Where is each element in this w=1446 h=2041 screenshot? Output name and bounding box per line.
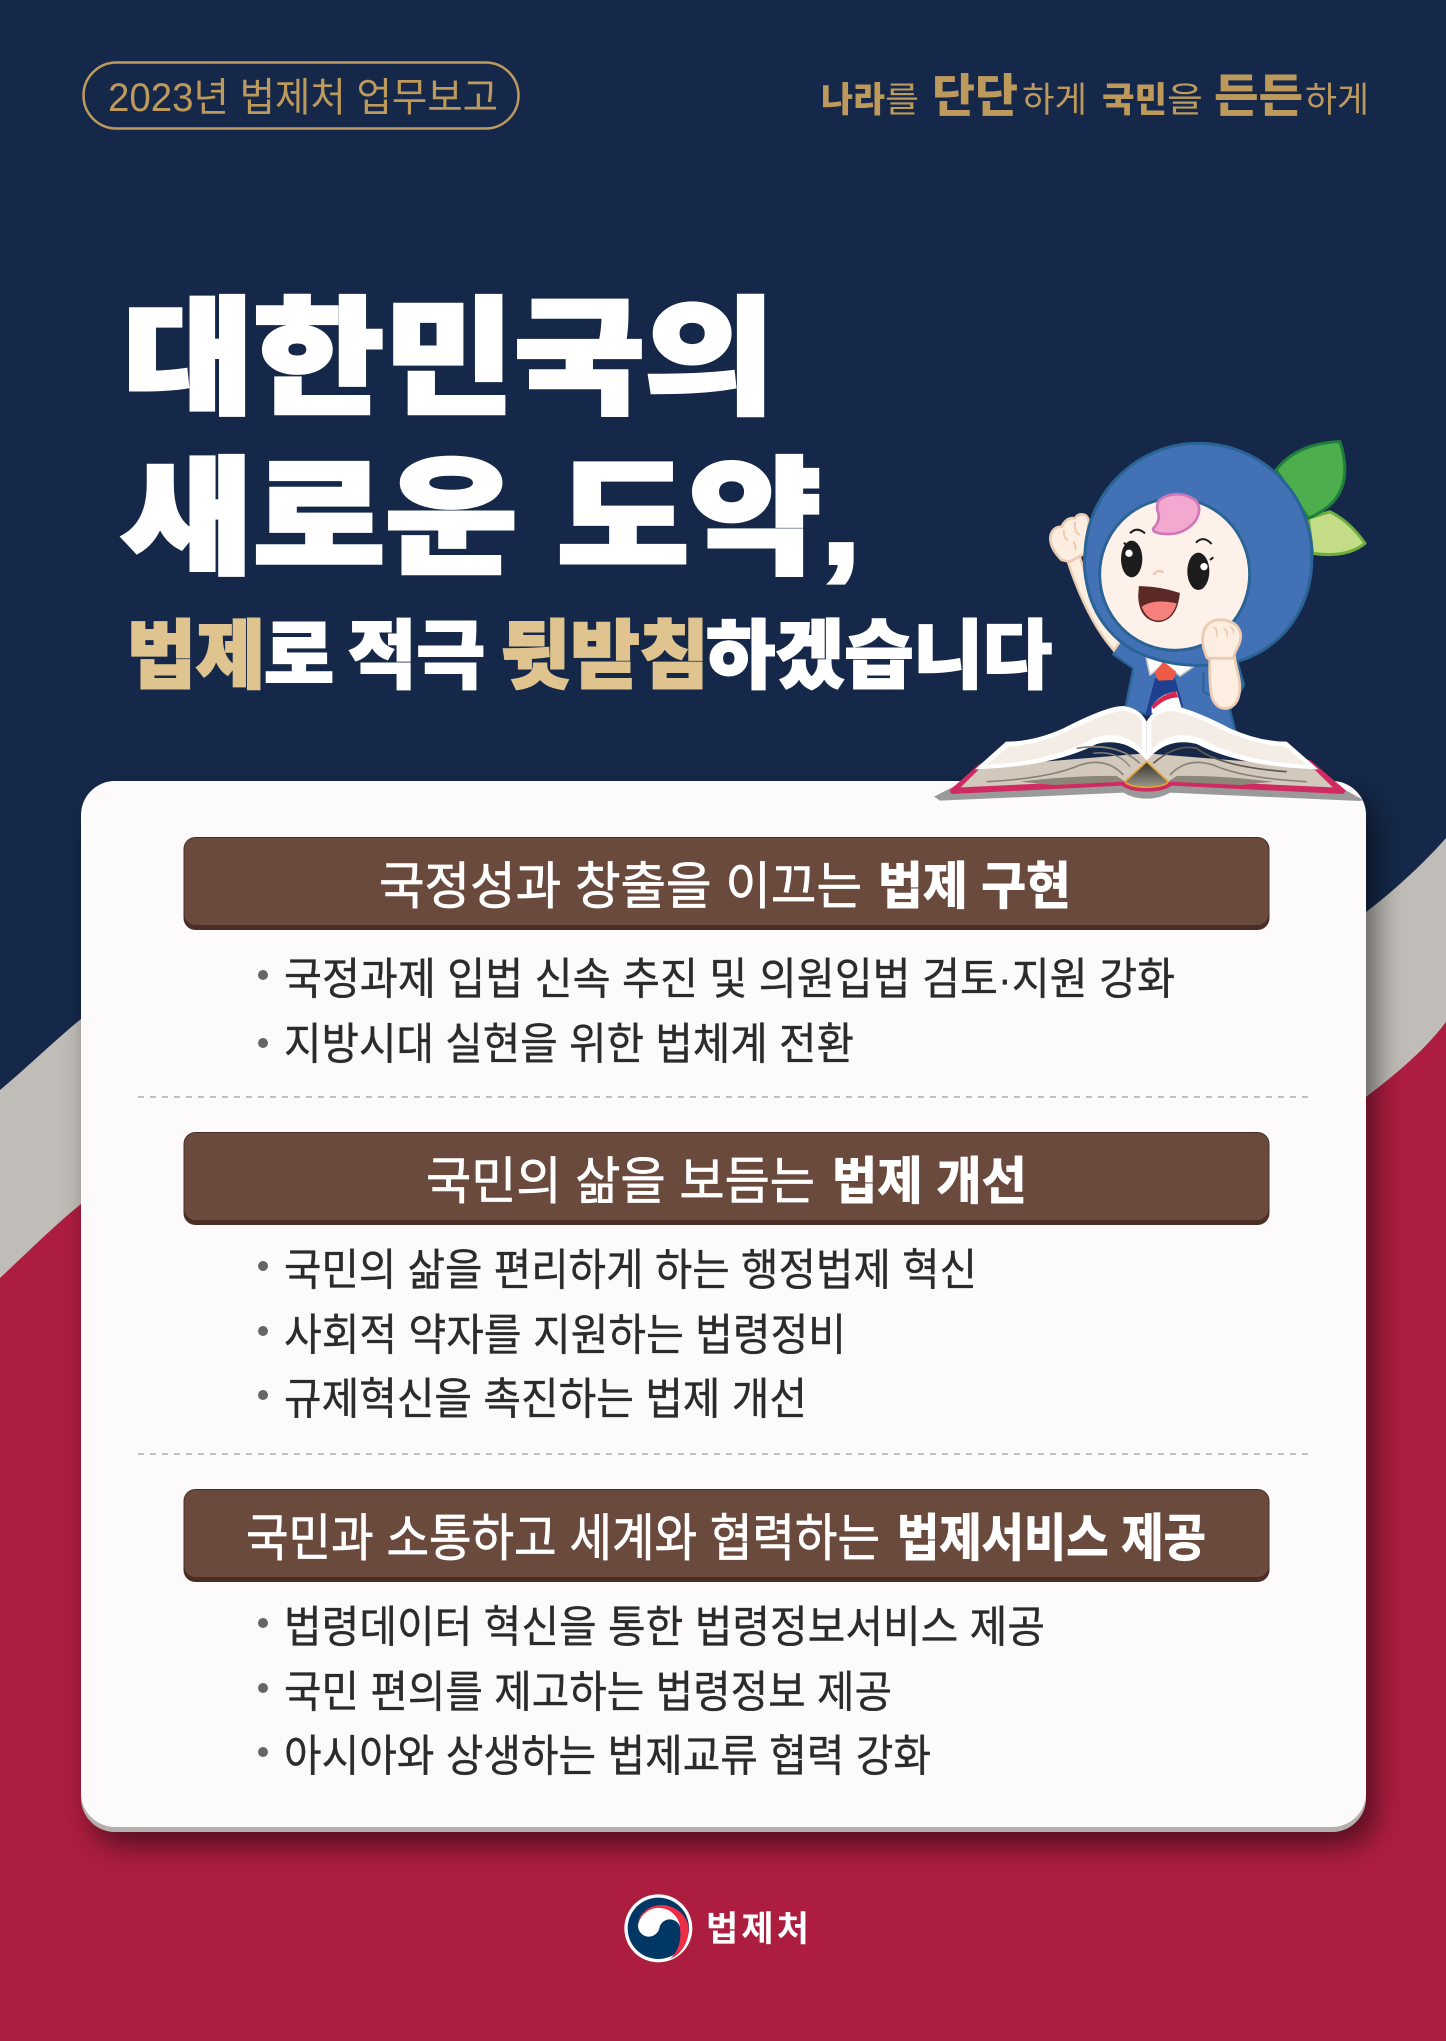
slogan: 단단 (932, 70, 1018, 122)
subtitle: 뒷받침 (501, 614, 709, 698)
section 2 bullets (258, 1246, 977, 1424)
badge: report title: 2023년 법제처 업무보고 (108, 76, 498, 120)
slogan: 하게 (1022, 81, 1087, 120)
section 2 bullets: 사회적 약자를 지원하는 법령정비 (284, 1311, 846, 1360)
book left pages (961, 706, 1147, 787)
section 3 bullets: 아시아와 상생하는 법제교류 협력 강화 (284, 1732, 931, 1781)
subtitle: 법제 (127, 614, 265, 698)
mascot hair petal (1153, 494, 1199, 534)
book shadow (934, 782, 1363, 801)
subtitle: 로 (264, 614, 334, 698)
section 1 heading bar: 국정성과 창출을 이끄는 (379, 858, 862, 915)
slogan: 하게 (1305, 81, 1369, 120)
section 3: legal services (184, 1489, 1270, 1781)
mascot with open book (934, 442, 1365, 801)
icon: light leaf (1308, 512, 1365, 555)
mascot raised fist (1050, 514, 1089, 562)
white content card (81, 781, 1366, 1832)
section 1 bullets: 국정과제 입법 신속 추진 및 의원입법 검토·지원 강화 (284, 955, 1175, 1004)
section 2 heading bar: 법제 개선 (832, 1153, 1027, 1210)
section 3 heading bar (184, 1489, 1270, 1582)
section 2 bullets: 규제혁신을 촉진하는 법제 개선 (284, 1375, 807, 1424)
section 3 bullets: 법령데이터 혁신을 통한 법령정보서비스 제공 (284, 1603, 1045, 1652)
slogan: 국민 (1102, 81, 1167, 120)
mascot face (1100, 498, 1250, 650)
title: 새로운 도약, (121, 448, 861, 590)
section 2: improving lives (184, 1132, 1270, 1424)
title (121, 288, 861, 590)
section 3 bullets: 국민 편의를 제고하는 법령정보 제공 (284, 1668, 892, 1717)
mascot mouth (1139, 587, 1179, 622)
section 1: national performance (184, 837, 1270, 1069)
slogan: 를 (885, 81, 919, 120)
subtitle: 하겠습니다 (706, 614, 1052, 698)
mascot eyes (1121, 530, 1213, 590)
section 1 bullets: 지방시대 실현을 위한 법체계 전환 (284, 1020, 854, 1069)
title: 대한민국의 (123, 288, 775, 430)
slogan: 나라 (821, 81, 885, 120)
book spine (1125, 762, 1168, 787)
mascot body (1113, 640, 1244, 730)
section 3 heading bar: 국민과 소통하고 세계와 협력하는 (246, 1510, 880, 1567)
slogan: 을 (1167, 81, 1203, 120)
section 2 heading bar (184, 1132, 1270, 1225)
subtitle (127, 614, 1052, 698)
section 2 heading bar: 국민의 삶을 보듬는 (426, 1153, 815, 1210)
background: crimson wave (0, 1022, 1446, 2041)
section 1 bullets (258, 955, 1175, 1069)
slogan (821, 70, 1369, 122)
section 1 heading bar (184, 837, 1270, 930)
logo text: 법제처 (706, 1910, 809, 1949)
logo: government emblem (624, 1894, 692, 1962)
mascot hood (1084, 443, 1312, 665)
badge: report title (84, 62, 518, 128)
section 3 bullets (258, 1603, 1045, 1781)
section 3 heading bar: 법제서비스 제공 (897, 1510, 1206, 1567)
section 2 bullets: 국민의 삶을 편리하게 하는 행정법제 혁신 (284, 1246, 977, 1295)
mascot raised arm (1067, 552, 1120, 651)
slogan: 든든 (1214, 70, 1303, 122)
book right pages (1147, 706, 1333, 787)
mascot front arm and fist (1203, 620, 1241, 709)
icon: green leaf (1276, 442, 1345, 518)
section 1 heading bar: 법제 구현 (878, 858, 1071, 915)
book cover (949, 760, 1346, 794)
subtitle: 적극 (348, 614, 485, 698)
background: grey wave (0, 838, 1446, 2041)
